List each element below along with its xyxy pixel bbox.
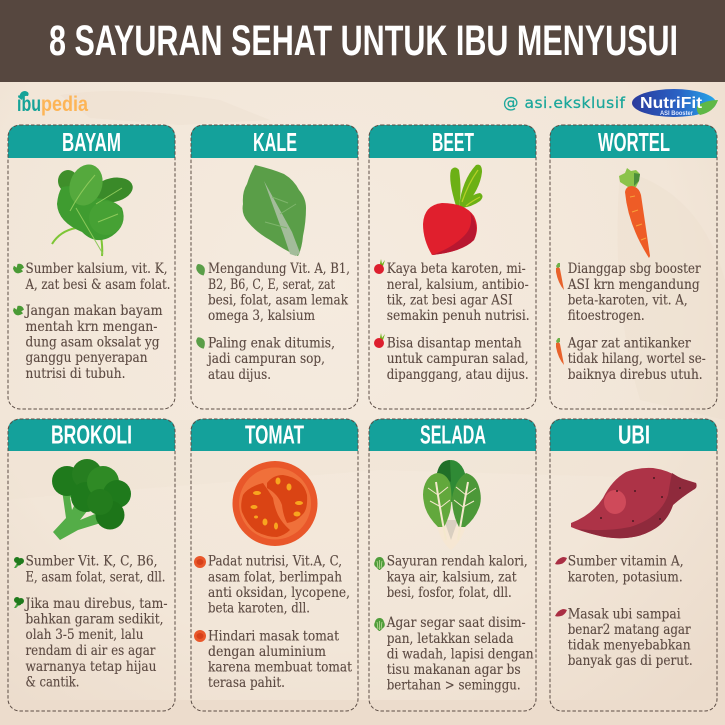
icon: bullet (13, 264, 24, 273)
text block: ganggu penyerapan (26, 350, 148, 366)
text block: nutrisi di tubuh. (26, 366, 126, 382)
text block: karoten, potasium. (568, 570, 683, 586)
text block: tik, zat besi agar ASI (387, 292, 513, 308)
text block: baiknya direbus utuh. (568, 367, 703, 383)
text block: anti oksidan, lycopene, (208, 585, 350, 601)
text block: Sayuran rendah kalori, (387, 554, 528, 570)
text block: semakin penuh nutrisi. (387, 308, 530, 324)
heading: brokoli: BROKOLI (51, 420, 132, 450)
text block (208, 554, 350, 616)
text block: dung asam oksalat yg (26, 334, 160, 350)
text block (208, 261, 350, 324)
text block: Dianggap sbg booster (568, 261, 701, 277)
text block: & cantik. (26, 675, 80, 691)
text block: Sumber kalsium, vit. K, (26, 261, 168, 277)
icon: bullet (196, 337, 205, 349)
text block: Padat nutrisi, Vit.A, C, (208, 554, 342, 570)
logo: ibupedia: ibu (17, 93, 41, 116)
text block (386, 615, 534, 694)
icon: bullet (556, 338, 564, 365)
icon: broccoli (52, 459, 131, 540)
panel: selada (369, 419, 536, 711)
text block: pan, letakkan selada (387, 631, 514, 647)
icon: bullet (374, 557, 385, 570)
text block: terasa pahit. (208, 675, 285, 691)
text block: Jangan makan bayam (24, 303, 163, 319)
text block: bertahan > seminggu. (387, 678, 521, 694)
text block: Sumber Vit. K, C, B6, (26, 554, 158, 570)
text block: Kaya beta karoten, mi- (387, 261, 526, 277)
icon: bullet (194, 630, 206, 642)
text block: mentah krn mengan- (26, 319, 158, 335)
text block: bahkan garam sedikit, (26, 612, 164, 628)
icon: bullet (556, 263, 564, 290)
icon: bullet (196, 264, 205, 275)
panel: kale (191, 125, 358, 409)
text block: benar2 matang agar (568, 622, 691, 638)
text block: tisu makanan agar bs (387, 662, 521, 678)
heading: ubi: UBI (618, 420, 650, 450)
logo: ibupedia: pedia (41, 93, 88, 116)
text block: Mengandung Vit. A, B1, (208, 261, 350, 277)
text block: tidak hilang, wortel se- (568, 351, 706, 367)
social handle: @ asi.eksklusif (503, 94, 626, 112)
icon: tomato slice (232, 461, 318, 546)
text block: Sumber vitamin A, (568, 554, 684, 570)
icon: kale leaf (243, 165, 306, 256)
text block: dengan aluminium (208, 644, 326, 660)
text block (24, 303, 163, 382)
text block: banyak gas di perut. (568, 653, 693, 669)
heading: kale: KALE (253, 127, 297, 157)
text block: dipanggang, atau dijus. (387, 367, 529, 383)
heading: bayam: BAYAM (62, 127, 121, 157)
text block (567, 261, 701, 324)
text block: Agar segar saat disim- (386, 615, 526, 631)
icon: bullet (194, 556, 206, 568)
text block (568, 554, 684, 586)
text block (568, 606, 693, 669)
icon: spinach (52, 160, 135, 256)
text block: E, asam folat, serat, dll. (26, 570, 166, 586)
icon: carrot (619, 168, 650, 258)
text block: besi, fosfor, folat, dll. (387, 585, 512, 601)
panel: beet (369, 125, 536, 409)
logo: ibupedia (17, 91, 88, 116)
icon: bullet (14, 597, 24, 608)
header banner (0, 0, 725, 82)
text block: fitoestrogen. (568, 308, 645, 324)
logo: NutriFit: NutriFit (640, 95, 703, 112)
icon: bullet (555, 609, 567, 616)
icon: bullet (374, 618, 385, 631)
text block: kaya air, kalsium, zat (387, 570, 517, 586)
text block (26, 554, 166, 586)
text block: B2, B6, C, E, serat, zat (208, 277, 335, 293)
text block: Paling enak ditumis, (208, 336, 335, 352)
text block: atau dijus. (208, 367, 271, 383)
text block: ASI krn mengandung (567, 277, 700, 293)
icon: bullet (555, 557, 567, 564)
text block: Hindari masak tomat (208, 628, 339, 644)
text block: tidak menyebabkan (568, 638, 691, 654)
text block: omega 3, kalsium (208, 308, 315, 324)
icon: bullet (374, 259, 385, 274)
text block (567, 336, 706, 383)
logo: NutriFit: ASI Booster (660, 110, 693, 117)
icon: lettuce (423, 460, 481, 550)
text block: jadi campuran sop, (206, 351, 325, 367)
heading: tomat: TOMAT (245, 420, 304, 450)
text block (206, 336, 335, 383)
heading: beet: BEET (432, 127, 474, 157)
panel: wortel (550, 125, 717, 409)
icon: beet (423, 165, 482, 255)
text block: besi, folat, asam lemak (208, 292, 349, 308)
text block: Jika mau direbus, tam- (24, 596, 167, 612)
panel: bayam (8, 125, 175, 409)
heading: selada: SELADA (420, 420, 486, 450)
text block (387, 261, 530, 324)
text block (24, 596, 167, 691)
text block: A, zat besi & asam folat. (25, 277, 170, 293)
panel: tomat (191, 419, 358, 711)
text block: neral, kalsium, antibio- (387, 277, 529, 293)
heading: wortel: WORTEL (598, 127, 670, 157)
text block (25, 261, 170, 293)
icon: bullet (14, 557, 24, 568)
icon: bullet (13, 306, 24, 315)
text block: warnanya tetap hijau (26, 659, 157, 675)
panel: ubi (550, 419, 717, 711)
text block: Bisa disantap mentah (387, 336, 522, 352)
icon: sweet potato (571, 468, 697, 538)
text block: beta karoten, dll. (208, 600, 310, 616)
text block: Agar zat antikanker (567, 336, 691, 352)
text block: karena membuat tomat (208, 660, 352, 676)
logo: NutriFit (632, 89, 718, 117)
text block: untuk campuran salad, (387, 351, 529, 367)
text block: Masak ubi sampai (568, 606, 681, 622)
text block: olah 3-5 menit, lalu (26, 627, 144, 643)
panel: brokoli (8, 419, 175, 711)
text block (387, 336, 529, 383)
text block: asam folat, berlimpah (208, 570, 342, 586)
icon: bullet (374, 333, 385, 348)
text block (387, 554, 528, 601)
text block (208, 628, 352, 691)
text block: beta-karoten, vit. A, (568, 292, 688, 308)
text block: rendam di air es agar (26, 643, 156, 659)
text block: di wadah, lapisi dengan (387, 646, 534, 662)
